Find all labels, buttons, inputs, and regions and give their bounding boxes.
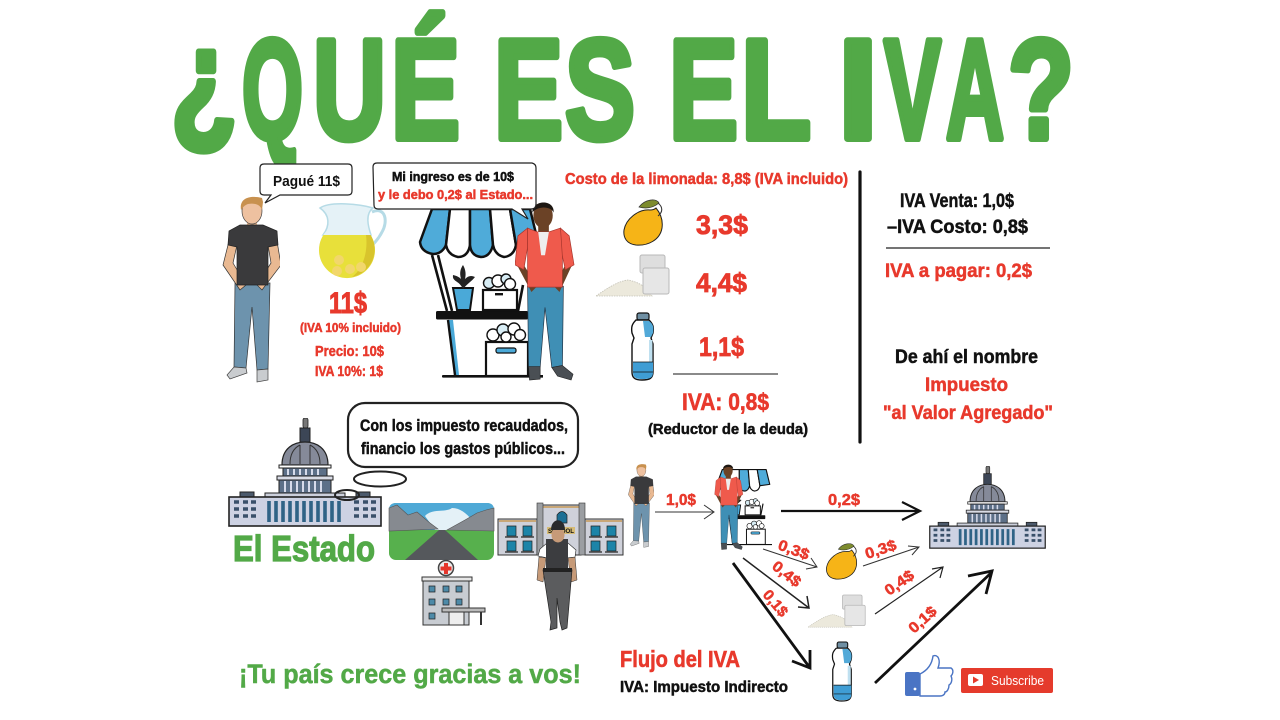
thought bubble: Con los impuesto recaudados, [360,417,568,435]
small vendor [715,465,743,550]
panel: customer and vendor [223,163,574,382]
title: L [741,10,809,170]
small capitol [930,466,1045,548]
title: ? [1008,10,1074,170]
label: 0,1$ to State: 0,1$ [905,602,941,637]
illustration: lemonade stall [420,209,547,378]
title: I [838,10,878,170]
flow arrow: vendor to State [781,502,920,520]
title: Q [242,10,303,170]
slogan: ¡Tu país crece gracias a vos! [239,659,581,689]
note: debt reducer: (Reductor de la deuda) [648,421,808,438]
explanation of the name: Impuesto [925,375,1008,396]
total IVA: IVA: 0,8$ [682,389,770,416]
label: 0,2$: 0,2$ [828,492,860,509]
flow arrow: vendor to bottle [733,563,810,668]
title: E [669,10,738,170]
price breakdown: Precio: 10$ [315,344,384,360]
explanation of the name: "al Valor Agregado" [883,403,1053,424]
title: U [313,10,386,170]
IVA cost: –IVA Costo: 0,8$ [887,217,1028,238]
speech bubble: vendor: y le debo 0,2$ al Estado... [378,188,533,202]
note: indirect tax: IVA: Impuesto Indirecto [620,679,788,696]
heading: IVA flow: Flujo del IVA [620,646,740,672]
icon: sugar [596,255,669,296]
flow arrow: vendor to lemon [763,549,817,569]
illustration: police officer [537,520,577,630]
subscribe button [961,668,1053,693]
title: ¿ [171,0,237,158]
small lemon [826,544,857,579]
flow arrow: vendor to sugar [743,558,809,608]
subscribe button: Subscribe [991,674,1044,688]
value: sugar cost: 4,4$ [696,268,747,298]
price breakdown: IVA 10%: 1$ [315,364,383,380]
flow arrow: customer to vendor [655,505,714,519]
label: 0,1$ to bottle: 0,1$ [759,587,792,621]
explanation of the name: De ahí el nombre [895,347,1038,368]
title: A [946,10,1004,170]
price breakdown: (IVA 10% incluido) [300,321,401,335]
speech bubble: vendor: Mi ingreso es de 10$ [392,170,514,184]
label: 1,0$: 1,0$ [666,492,696,509]
panel: lemonade costs [565,171,848,438]
flow arrow: sugar to State [875,567,943,614]
value: bottle cost: 1,1$ [699,332,744,362]
illustration: vendor [515,202,574,380]
illustration: hospital [422,560,485,625]
label: 0,3$ to State: 0,3$ [863,537,899,563]
speech bubble: vendor [373,163,536,219]
small stall [717,470,774,545]
icon: bottle [632,313,653,380]
heading: lemonade cost: Costo de la limonada: 8,8$ (IVA incluido) [565,171,848,188]
price breakdown: 11$ [329,287,367,320]
small customer [628,464,654,547]
title: É [391,10,460,170]
title: V [884,10,941,170]
icon: lemon [624,200,662,245]
illustration: capitol [229,418,381,526]
label: El Estado: El Estado [233,528,375,569]
IVA to pay: IVA a pagar: 0,2$ [885,261,1032,282]
title: S [565,10,635,170]
illustration: school: SCHOOL [548,528,574,535]
thought bubble [335,403,578,500]
thought bubble: financio los gastos públicos... [361,440,565,458]
small sugar [808,595,865,627]
IVA sale: IVA Venta: 1,0$ [900,191,1014,212]
speech bubble: customer [260,164,352,203]
panel: IVA flow diagram [620,464,1045,701]
small bottle [832,642,852,701]
illustration: road [389,503,494,560]
explanation of the name [883,347,1053,424]
icon: lemonade pitcher [319,204,385,278]
label: 0,4$ to sugar: 0,4$ [769,558,805,591]
price breakdown [300,287,401,380]
illustration: customer [223,197,281,382]
speech bubble: customer: Pagué 11$ [273,173,341,190]
value: lemon cost: 3,3$ [696,210,748,240]
label: 0,4$ to State: 0,4$ [882,567,918,599]
flow arrow: lemon to State [863,546,919,566]
flow arrow: bottle to State [875,571,992,683]
panel: the State [229,403,623,689]
panel: IVA calculation [883,191,1053,424]
label: 0,3$ to lemon: 0,3$ [776,537,812,564]
title: E [494,10,563,170]
icon: thumbs up [905,656,953,696]
illustration: school [498,503,623,555]
